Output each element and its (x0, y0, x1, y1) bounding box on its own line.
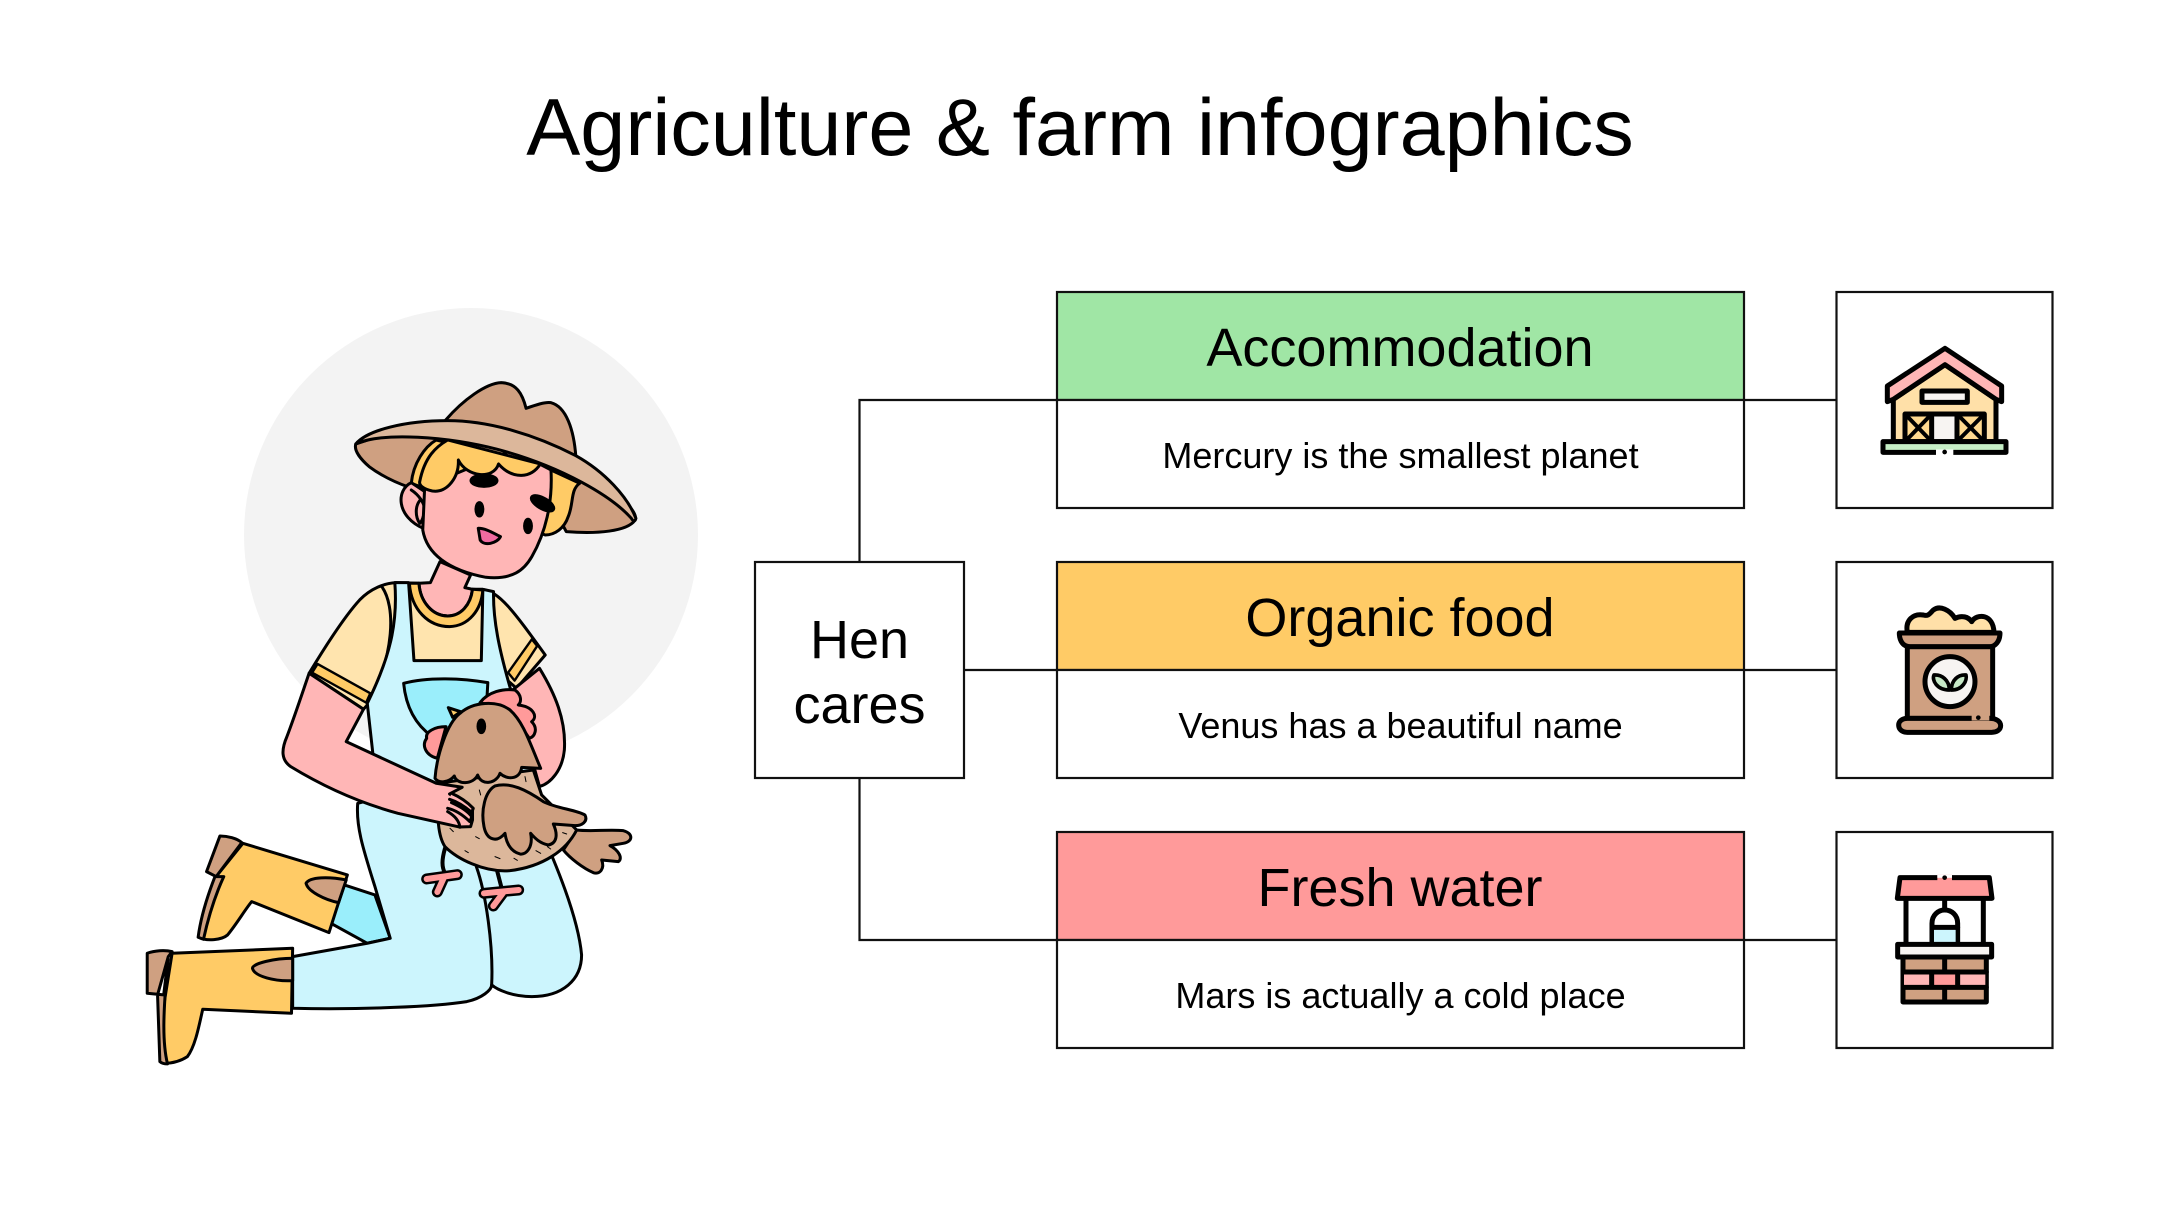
icon box: barn (1836, 292, 2052, 508)
left arm (283, 673, 473, 827)
back hair (411, 440, 580, 535)
hen legs and feet (427, 848, 519, 906)
background circle (244, 308, 698, 762)
hen eye (478, 720, 485, 733)
description: Fresh water (1057, 940, 1744, 1048)
hen head (435, 703, 541, 783)
icon box: sack (1836, 562, 2052, 778)
ear (401, 483, 432, 529)
hen (424, 690, 631, 906)
boot: front leg (147, 948, 293, 1064)
panel: Organic food (1057, 562, 1744, 778)
heading: Organic food: Organic food (1245, 588, 1555, 648)
hat brim band (356, 421, 636, 521)
farmer figure (147, 383, 636, 1064)
right arm (513, 668, 565, 787)
feather ticks (450, 777, 567, 860)
fringe (420, 440, 540, 491)
tail (563, 830, 631, 873)
bib pocket (404, 679, 488, 737)
description: Accommodation: Mercury is the smallest planet (1162, 435, 1639, 476)
eyes and mouth (471, 475, 557, 544)
description: Accommodation (1057, 400, 1744, 508)
sleeve stripes (312, 639, 537, 703)
neck (419, 562, 473, 616)
face (423, 450, 551, 578)
icon: water well (1897, 875, 1992, 1002)
wattle (424, 727, 446, 758)
hen body (438, 770, 577, 871)
description: Organic food: Venus has a beautiful name (1178, 705, 1623, 746)
overalls bib (367, 583, 536, 787)
collar (409, 583, 483, 627)
description: Fresh water: Mars is actually a cold place (1175, 975, 1626, 1016)
hat brim underside (355, 430, 636, 532)
heading: Fresh water: Fresh water (1257, 858, 1543, 918)
icon: seed sack (1899, 608, 2001, 732)
icon: barn (1883, 348, 2006, 454)
heading: Fresh water (1057, 832, 1744, 940)
icon box: well (1836, 832, 2052, 1048)
panel: Fresh water (1057, 832, 1744, 1048)
heading: Accommodation (1057, 292, 1744, 400)
hat crown (446, 383, 576, 477)
sleeve seam (370, 587, 391, 700)
center box: Hen cares: cares (793, 675, 926, 735)
heading: Organic food (1057, 562, 1744, 670)
illustration: farmer holding a hen (147, 308, 698, 1064)
boot: back leg (198, 836, 390, 943)
wing (483, 785, 586, 854)
heading: Accommodation: Accommodation (1206, 318, 1594, 378)
beak (448, 708, 461, 717)
description: Organic food (1057, 670, 1744, 778)
comb (480, 690, 535, 738)
connector lines (860, 400, 1836, 940)
shirt (309, 583, 545, 709)
fingers (448, 793, 473, 827)
overalls legs (293, 783, 582, 1009)
center box: Hen cares: Hen (810, 610, 909, 670)
center box: Hen cares (755, 562, 964, 778)
title: Agriculture & farm infographics (526, 83, 1634, 173)
panel: Accommodation (1057, 292, 1744, 508)
